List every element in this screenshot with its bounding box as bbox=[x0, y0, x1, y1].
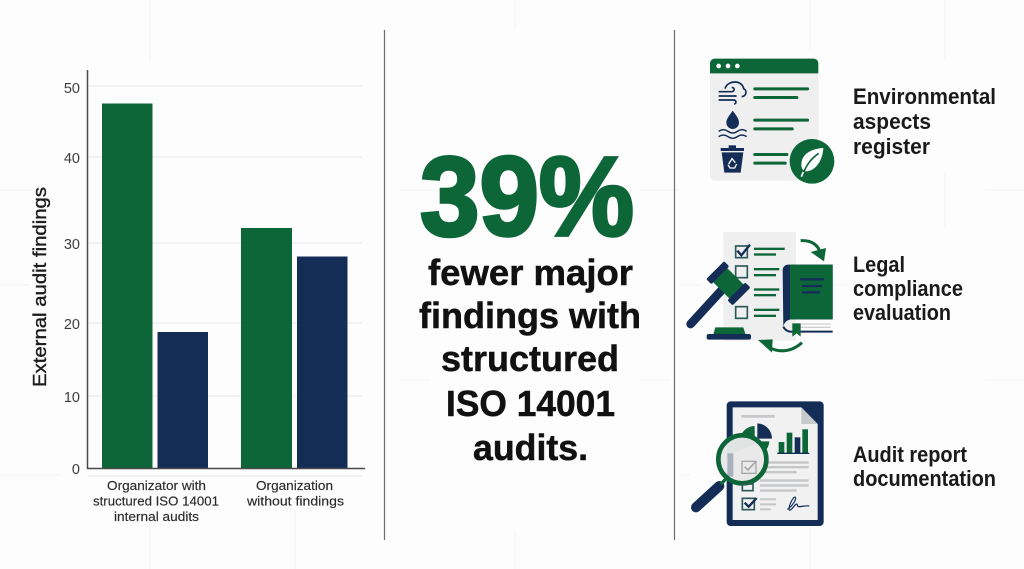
icon: environmental aspects register bbox=[710, 59, 834, 184]
label: legal compliance evaluation: compliance bbox=[853, 276, 963, 301]
statement text: ISO 14001 bbox=[446, 383, 615, 424]
x axis label: group 1: structured ISO 14001 bbox=[93, 494, 219, 508]
x axis label: group 2: Organization bbox=[256, 478, 333, 493]
x axis label: group 1 bbox=[93, 478, 219, 524]
icon: audit report documentation bbox=[696, 401, 824, 526]
y axis labels bbox=[64, 81, 80, 478]
bar: group 1 navy bbox=[158, 332, 208, 468]
y axis labels: 40 bbox=[64, 151, 80, 167]
statement text: fewer major bbox=[428, 252, 633, 293]
y axis labels: 20 bbox=[64, 317, 80, 333]
y axis labels: 30 bbox=[64, 237, 80, 253]
icon: legal compliance evaluation bbox=[691, 232, 833, 353]
label: environmental aspects register: aspects bbox=[853, 109, 931, 134]
divider right bbox=[674, 30, 676, 540]
bar: group 2 navy bbox=[297, 256, 348, 468]
y axis title: External audit findings bbox=[29, 187, 50, 387]
label: legal compliance evaluation: evaluation bbox=[853, 300, 951, 325]
x axis label: group 2 bbox=[246, 478, 345, 508]
label: legal compliance evaluation: Legal bbox=[853, 252, 905, 277]
y axis labels: 10 bbox=[64, 390, 80, 406]
label: legal compliance evaluation bbox=[853, 252, 963, 325]
bar: group 2 green bbox=[241, 228, 292, 468]
label: audit report documentation bbox=[853, 442, 996, 491]
statement text bbox=[419, 252, 641, 468]
y axis labels: 0 bbox=[72, 462, 80, 478]
label: environmental aspects register: register bbox=[853, 134, 930, 159]
headline stat: 39% bbox=[420, 134, 634, 259]
chart axes bbox=[88, 70, 365, 468]
statement text: audits. bbox=[473, 427, 588, 468]
bar: group 1 green bbox=[102, 104, 152, 468]
y axis labels: 50 bbox=[64, 81, 80, 97]
statement text: findings with bbox=[419, 295, 641, 336]
x axis label: group 1: Organizator with bbox=[107, 478, 206, 493]
label: audit report documentation: documentation bbox=[853, 466, 996, 491]
x axis label: group 1: internal audits bbox=[114, 509, 200, 524]
x axis label: group 2: without findings bbox=[246, 494, 345, 508]
label: environmental aspects register: Environmental bbox=[853, 84, 996, 109]
label: audit report documentation: Audit report bbox=[853, 442, 968, 467]
statement text: structured bbox=[441, 338, 619, 379]
divider left bbox=[384, 30, 386, 540]
label: environmental aspects register bbox=[853, 84, 996, 159]
bar chart bbox=[29, 70, 365, 524]
